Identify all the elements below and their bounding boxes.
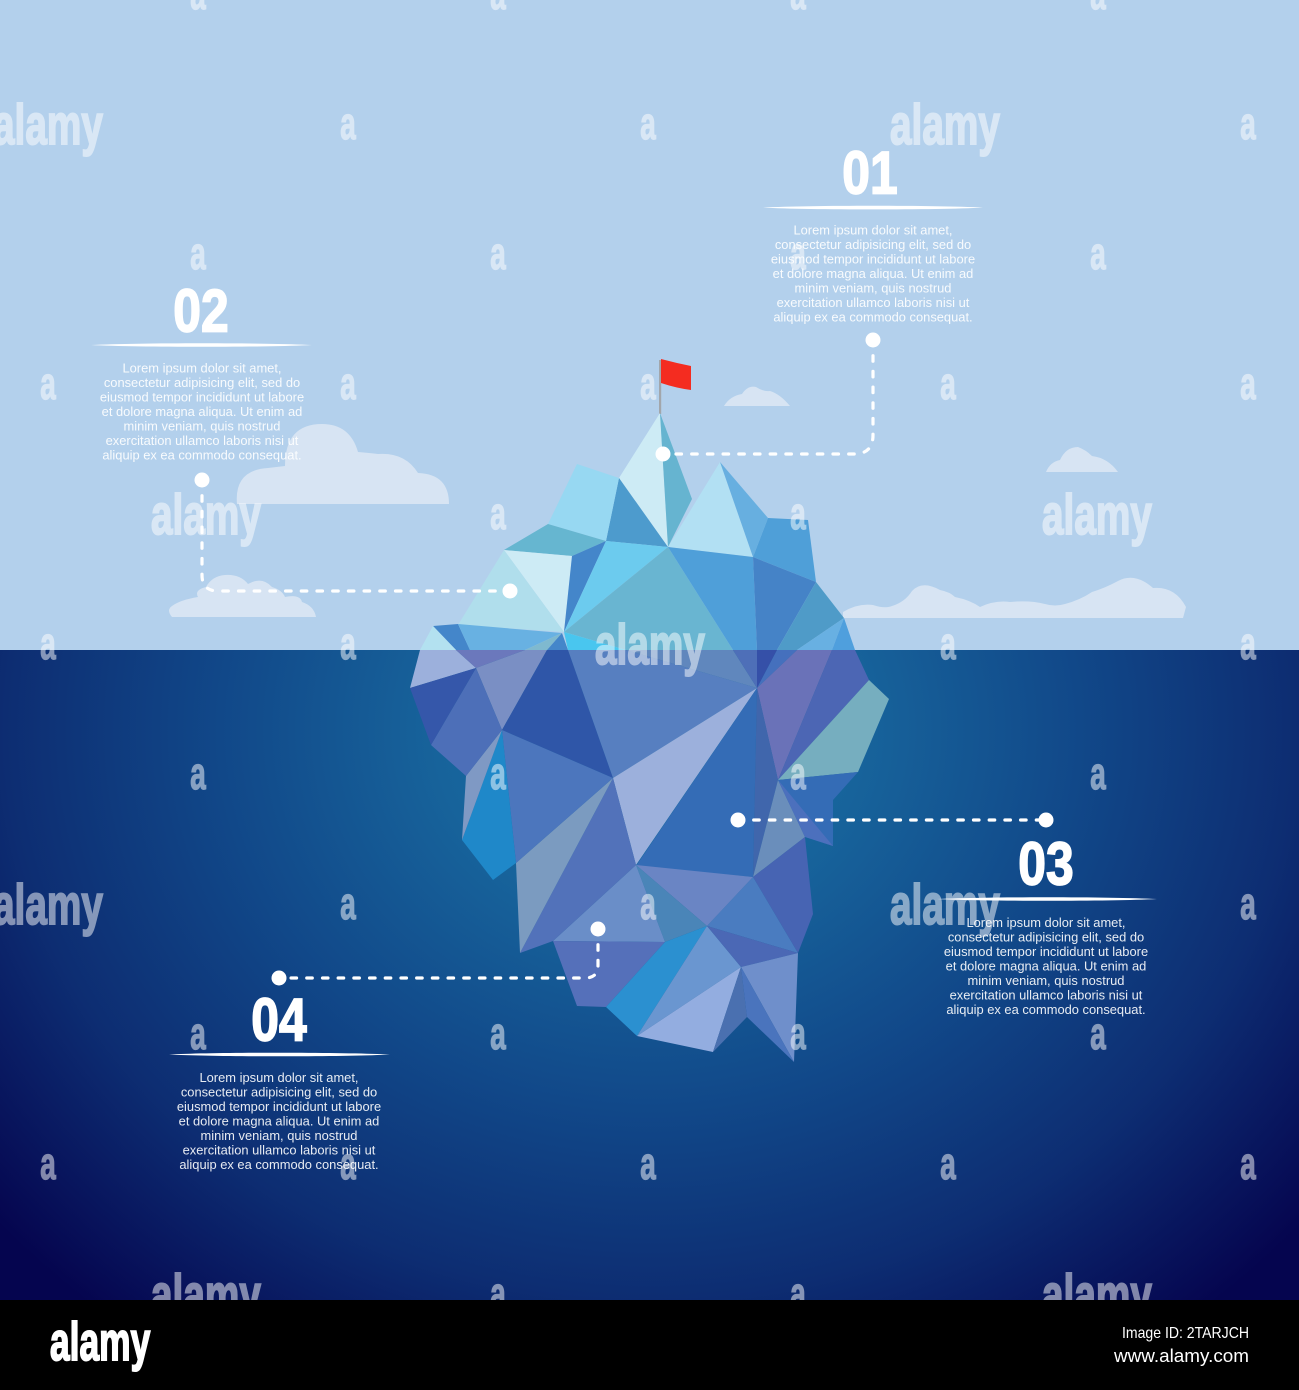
watermark small marks: a (1090, 1008, 1107, 1059)
connector 02 (194, 472, 518, 598)
block 02: eiusmod tempor incididunt ut labore (100, 390, 304, 404)
block 02: 02 (173, 277, 229, 345)
watermark small marks: a (490, 488, 507, 539)
block 01: consectetur adipisicing elit, sed do (775, 237, 971, 252)
watermark small marks: a (640, 878, 657, 929)
block 01: 01 (842, 139, 898, 207)
watermark small marks: a (640, 358, 657, 409)
watermark logos: alamy (890, 874, 1000, 937)
connector 03 (730, 812, 1054, 828)
footer bar: alamy (50, 1311, 151, 1372)
block 02: consectetur adipisicing elit, sed do (104, 375, 300, 390)
block 02: aliquip ex ea commodo consequat. (102, 448, 302, 462)
watermark logos: alamy (1042, 1264, 1152, 1327)
watermark small marks: a (1090, 748, 1107, 799)
footer bar: Image ID: 2TARJCH (1122, 1325, 1249, 1342)
block 04: et dolore magna aliqua. Ut enim ad (179, 1114, 379, 1128)
block 02: exercitation ullamco laboris nisi ut (106, 433, 299, 448)
block 04 (169, 986, 390, 1172)
watermark logos: alamy (151, 484, 261, 547)
block 03: aliquip ex ea commodo consequat. (946, 1002, 1146, 1017)
block 01: Lorem ipsum dolor sit amet, (793, 222, 953, 238)
block 03: et dolore magna aliqua. Ut enim ad (946, 958, 1146, 974)
block 04: aliquip ex ea commodo consequat. (179, 1157, 379, 1172)
block 04: exercitation ullamco laboris nisi ut (183, 1142, 376, 1158)
flag (659, 359, 691, 414)
watermark small marks: a (640, 98, 657, 149)
watermark small marks: a (190, 228, 207, 279)
watermark logos (0, 94, 1152, 1327)
block 03: 03 (1018, 830, 1074, 898)
block 03 (937, 830, 1157, 1017)
block 01: eiusmod tempor incididunt ut labore (771, 252, 975, 266)
watermark small marks: a (40, 618, 57, 669)
watermark small marks: a (340, 878, 357, 929)
block 03: exercitation ullamco laboris nisi ut (950, 988, 1143, 1002)
block 03: consectetur adipisicing elit, sed do (948, 930, 1144, 944)
footer bar: www.alamy.com (1113, 1346, 1249, 1366)
watermark small marks: a (40, 1138, 57, 1189)
block 04: eiusmod tempor incididunt ut labore (177, 1099, 381, 1114)
block 01 (763, 139, 983, 324)
watermark small marks: a (490, 1008, 507, 1059)
watermark small marks: a (790, 1008, 807, 1059)
clouds (169, 387, 1186, 618)
block 04: minim veniam, quis nostrud (201, 1128, 357, 1143)
watermark small marks: a (1240, 618, 1257, 669)
block 03: Lorem ipsum dolor sit amet, (966, 915, 1126, 930)
block 01: aliquip ex ea commodo consequat. (773, 310, 973, 324)
watermark small marks: a (640, 1138, 657, 1189)
connector 04 (272, 922, 606, 986)
sky background (0, 0, 1299, 650)
block 02: et dolore magna aliqua. Ut enim ad (102, 404, 302, 419)
watermark small marks: a (490, 228, 507, 279)
watermark small marks: a (340, 1138, 357, 1189)
block 04: Lorem ipsum dolor sit amet, (199, 1070, 359, 1085)
watermark small marks: a (490, 748, 507, 799)
watermark small marks: a (40, 358, 57, 409)
watermark small marks: a (790, 228, 807, 279)
watermark small marks: a (940, 358, 957, 409)
iceberg below water (410, 650, 889, 1062)
iceberg above water (420, 413, 855, 650)
block 01: minim veniam, quis nostrud (795, 280, 951, 296)
connector 01 (656, 332, 880, 462)
watermark small marks: a (790, 1268, 807, 1319)
watermark small marks: a (340, 358, 357, 409)
watermark logos: alamy (890, 94, 1000, 157)
watermark small marks: a (940, 618, 957, 669)
block 02 (91, 277, 312, 462)
block 01: et dolore magna aliqua. Ut enim ad (773, 266, 973, 281)
watermark small marks: a (1240, 878, 1257, 929)
block 04: consectetur adipisicing elit, sed do (181, 1084, 377, 1100)
watermark small marks: a (490, 1268, 507, 1319)
watermark small marks: a (1090, 228, 1107, 279)
watermark logos: alamy (595, 614, 705, 677)
block 03: minim veniam, quis nostrud (968, 973, 1124, 988)
watermark logos: alamy (1042, 484, 1152, 547)
watermark small marks: a (790, 488, 807, 539)
block 02: Lorem ipsum dolor sit amet, (122, 360, 282, 376)
block 04: 04 (251, 986, 307, 1054)
watermark small marks: a (940, 1138, 957, 1189)
block 01: exercitation ullamco laboris nisi ut (777, 295, 970, 310)
block 03: eiusmod tempor incididunt ut labore (944, 944, 1148, 959)
watermark small marks: a (190, 748, 207, 799)
watermark small marks: a (340, 618, 357, 669)
block 02: minim veniam, quis nostrud (124, 418, 280, 434)
watermark small marks: a (1240, 1138, 1257, 1189)
watermark small marks: a (1240, 358, 1257, 409)
watermark small marks: a (1240, 98, 1257, 149)
ocean background (0, 650, 1299, 1300)
watermark small marks: a (340, 98, 357, 149)
watermark small marks: a (790, 748, 807, 799)
watermark logos: alamy (151, 1264, 261, 1327)
footer bar (0, 1300, 1299, 1390)
watermark small marks: a (190, 1008, 207, 1059)
